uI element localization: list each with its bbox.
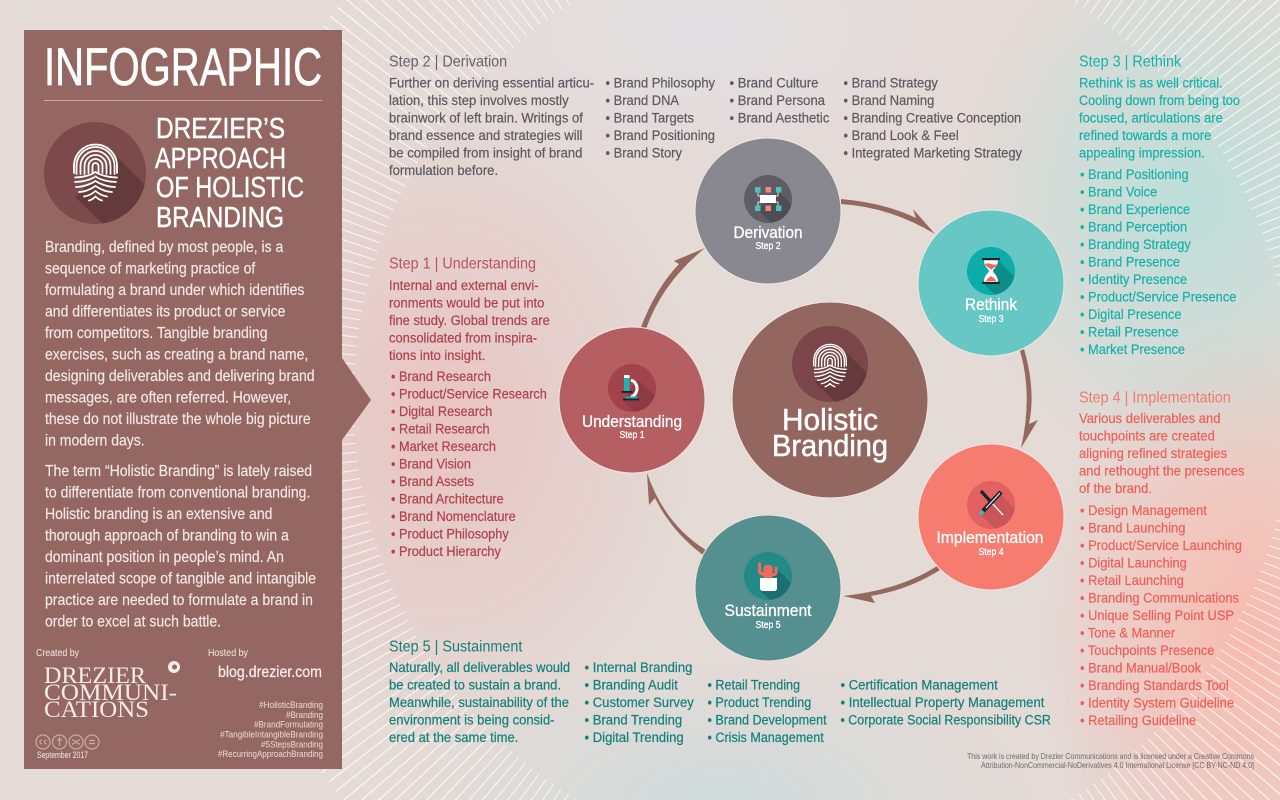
list: column 3: • Brand Naming bbox=[844, 93, 934, 108]
text block: Meanwhile, sustainability of the bbox=[389, 695, 569, 710]
list: • Product/Service Launching bbox=[1080, 538, 1242, 553]
node label bbox=[582, 412, 682, 441]
list: column 2: • Brand Aesthetic bbox=[730, 110, 830, 126]
heading: Step 5 | Sustainment bbox=[389, 638, 523, 656]
hashtags: #5StepsBranding bbox=[261, 740, 323, 750]
text block: of the brand. bbox=[1079, 481, 1152, 496]
node label: Rethink bbox=[965, 295, 1017, 314]
list: column 3: • Brand Strategy bbox=[844, 75, 938, 91]
subtitle: DREZIER’S bbox=[156, 113, 285, 145]
text block: branding definition: Branding, defined by most people, is a bbox=[45, 239, 284, 256]
list: • Identity Presence bbox=[1080, 271, 1187, 287]
arrow: understanding to derivation bbox=[641, 248, 705, 329]
credit: hosted by: blog.drezier.com bbox=[218, 664, 322, 681]
list: column 1: • Brand DNA bbox=[606, 93, 679, 108]
text block: be created to sustain a brand. bbox=[389, 677, 561, 693]
text block bbox=[389, 75, 594, 178]
arrow: derivation to rethink bbox=[841, 199, 935, 234]
text block: holistic branding definition: thorough approach of branding to win a bbox=[45, 528, 290, 545]
icon: microscope bbox=[608, 364, 656, 412]
text block: consolidated from inspira- bbox=[389, 330, 537, 346]
text block: holistic branding definition: Holistic branding is an extensive and bbox=[45, 506, 272, 523]
list: • Brand Experience bbox=[1080, 201, 1190, 217]
node: step 3 rethink bbox=[918, 210, 1064, 356]
list: • Brand Architecture bbox=[391, 491, 504, 507]
hashtags: #RecurringApproachBranding bbox=[218, 749, 323, 760]
text block: lation, this step involves mostly bbox=[389, 93, 569, 108]
text block: branding definition: formulating a brand under which identifies bbox=[45, 282, 304, 299]
list: • Brand Positioning bbox=[1080, 166, 1189, 182]
list: • Branding Standards Tool bbox=[1080, 678, 1229, 693]
text block: Various deliverables and bbox=[1079, 411, 1220, 426]
icon: potted cactus bbox=[744, 552, 792, 600]
list: • Market Presence bbox=[1080, 341, 1185, 357]
hub label: Branding bbox=[772, 428, 888, 463]
list: column 3: • Intellectual Property Management bbox=[840, 695, 1045, 710]
list: • Brand Research bbox=[391, 368, 491, 384]
node label: Implementation bbox=[936, 528, 1044, 547]
list: column 1: • Brand Targets bbox=[606, 110, 694, 126]
arrow: implementation to sustainment bbox=[843, 566, 940, 603]
list: • Branding Communications bbox=[1080, 590, 1239, 606]
list bbox=[1080, 166, 1236, 357]
list: • Branding Strategy bbox=[1080, 236, 1191, 252]
text block: branding definition: messages, are often referred. However, bbox=[45, 390, 291, 407]
text block: touchpoints are created bbox=[1079, 428, 1215, 444]
list: • Product Philosophy bbox=[391, 526, 509, 542]
text block: holistic branding definition: order to excel at such battle. bbox=[45, 614, 221, 631]
panel: step 1 understanding bbox=[389, 255, 550, 559]
text block: brainwork of left brain. Writings of bbox=[389, 110, 583, 126]
list: column 3 bbox=[844, 75, 1022, 161]
text block: appealing impression. bbox=[1079, 145, 1205, 161]
node label: Step 2 bbox=[756, 240, 781, 252]
text block: branding definition: and differentiates its product or service bbox=[45, 304, 285, 321]
text block: environment is being consid- bbox=[389, 712, 555, 728]
credit: hosted by: Hosted by bbox=[208, 647, 249, 659]
list: column 2: • Product Trending bbox=[708, 694, 811, 710]
list: • Brand Manual/Book bbox=[1080, 660, 1201, 676]
credit: created by logo: COMMUNI- bbox=[44, 680, 177, 705]
text block: brand essence and strategies will bbox=[389, 128, 582, 143]
list: • Retail Research bbox=[391, 421, 490, 437]
text block: holistic branding definition: dominant position in people’s mind. An bbox=[45, 549, 284, 566]
title: INFOGRAPHIC bbox=[44, 38, 322, 97]
panel: step 3 rethink bbox=[1079, 53, 1240, 357]
list: column 1: • Brand Story bbox=[606, 145, 682, 161]
list: column 1: • Brand Positioning bbox=[606, 128, 715, 143]
list: • Brand Perception bbox=[1080, 219, 1187, 235]
node: holistic branding hub bbox=[732, 302, 928, 498]
list: column 1: • Brand Trending bbox=[584, 712, 682, 728]
list: • Brand Assets bbox=[391, 473, 474, 489]
list: column 2 bbox=[730, 75, 830, 126]
icon: fingerprint bbox=[792, 326, 868, 402]
node label: Step 3 bbox=[978, 313, 1004, 325]
hashtags: #BrandFormulating bbox=[254, 720, 323, 730]
icon: structure diagram bbox=[744, 175, 792, 223]
list: • Brand Vision bbox=[391, 456, 471, 472]
text block: refined towards a more bbox=[1079, 128, 1211, 143]
list: • Brand Nomenclature bbox=[391, 508, 516, 524]
text block bbox=[389, 278, 550, 363]
subtitle: APPROACH bbox=[155, 143, 286, 175]
list: column 1: • Branding Audit bbox=[584, 677, 678, 693]
text block: branding definition: from competitors. Tangible branding bbox=[45, 325, 267, 342]
node label bbox=[724, 601, 812, 631]
hashtags bbox=[218, 700, 323, 760]
hashtags: #HolisticBranding bbox=[259, 700, 323, 711]
list: • Brand Voice bbox=[1080, 184, 1157, 200]
text block: holistic branding definition: interrelated scope of tangible and intangible bbox=[45, 571, 316, 588]
text block: focused, articulations are bbox=[1079, 110, 1223, 126]
panel: step 5 sustainment bbox=[389, 638, 1051, 745]
text block: branding definition: designing deliverables and delivering brand bbox=[45, 368, 315, 385]
text block: formulation before. bbox=[389, 163, 498, 178]
text block: branding definition: in modern days. bbox=[45, 433, 145, 450]
text block bbox=[1079, 411, 1245, 496]
list: column 3: • Integrated Marketing Strategy bbox=[844, 145, 1022, 161]
text block: holistic branding definition bbox=[45, 463, 316, 631]
text block: ronments would be put into bbox=[389, 295, 544, 311]
list: column 1 bbox=[606, 75, 715, 161]
subtitle: OF HOLISTIC bbox=[156, 172, 304, 204]
text block: branding definition bbox=[45, 239, 315, 450]
node: step 1 understanding bbox=[559, 327, 705, 473]
text block: be compiled from insight of brand bbox=[389, 145, 582, 161]
node label bbox=[965, 295, 1017, 325]
list: • Retail Launching bbox=[1080, 573, 1184, 588]
heading: Step 4 | Implementation bbox=[1079, 389, 1231, 407]
arrow: rethink to implementation bbox=[1020, 349, 1038, 448]
list: • Product/Service Presence bbox=[1080, 289, 1236, 305]
list: • Retail Presence bbox=[1080, 324, 1179, 340]
list: • Identity System Guideline bbox=[1080, 695, 1234, 711]
list: • Digital Launching bbox=[1080, 555, 1187, 571]
node label bbox=[734, 223, 802, 252]
list: column 2: • Crisis Management bbox=[708, 729, 824, 745]
list: column 2: • Brand Development bbox=[708, 712, 827, 728]
list: column 3: • Certification Management bbox=[840, 677, 998, 693]
text block: Cooling down from being too bbox=[1079, 93, 1240, 108]
text block: holistic branding definition: The term “Holistic Branding” is lately raised bbox=[45, 463, 312, 480]
list: • Product/Service Research bbox=[391, 386, 547, 402]
date: September 2017 bbox=[37, 750, 88, 760]
icon: hourglass bbox=[967, 247, 1015, 295]
list: column 2: • Brand Persona bbox=[730, 93, 825, 108]
credit: created by logo: DREZIER bbox=[44, 663, 147, 688]
text block: ered at the same time. bbox=[389, 730, 518, 745]
text block: holistic branding definition: to differentiate from conventional branding. bbox=[45, 485, 310, 502]
credit: created by logo: Created by bbox=[36, 647, 80, 659]
hub label: Holistic bbox=[782, 402, 878, 437]
text block: fine study. Global trends are bbox=[389, 313, 550, 328]
list: column 1 bbox=[584, 660, 694, 745]
hashtags: #TangibleIntangibleBranding bbox=[220, 730, 323, 740]
heading: Step 1 | Understanding bbox=[389, 255, 536, 273]
heading: Step 2 | Derivation bbox=[389, 53, 507, 71]
credit: hosted by bbox=[208, 647, 322, 681]
node label: Step 4 bbox=[978, 546, 1004, 558]
heading: Step 3 | Rethink bbox=[1079, 53, 1182, 71]
node label: Derivation bbox=[734, 223, 802, 242]
list: • Digital Research bbox=[391, 403, 492, 419]
list: column 1: • Internal Branding bbox=[584, 660, 692, 675]
license note bbox=[967, 751, 1254, 770]
node: step 4 implementation bbox=[918, 444, 1064, 590]
node: step 2 derivation bbox=[695, 138, 841, 284]
list: column 1: • Customer Survey bbox=[584, 695, 694, 710]
hashtags: #Branding bbox=[286, 710, 323, 721]
hub label bbox=[772, 402, 888, 463]
list: • Digital Presence bbox=[1080, 306, 1181, 322]
text block: branding definition: exercises, such as creating a brand name, bbox=[45, 347, 308, 364]
list: column 2: • Retail Trending bbox=[708, 677, 800, 693]
list: column 1: • Digital Trending bbox=[584, 730, 684, 745]
text block: Further on deriving essential articu- bbox=[389, 75, 594, 91]
list: • Design Management bbox=[1080, 503, 1207, 518]
list: • Market Research bbox=[391, 438, 496, 454]
list: • Brand Launching bbox=[1080, 520, 1185, 536]
credit: created by logo bbox=[36, 647, 180, 722]
text block: Naturally, all deliverables would bbox=[389, 660, 570, 675]
text block: branding definition: sequence of marketing practice of bbox=[45, 261, 256, 278]
text block: tions into insight. bbox=[389, 348, 485, 363]
list bbox=[1080, 503, 1242, 728]
subtitle bbox=[155, 113, 304, 234]
node: step 5 sustainment bbox=[695, 515, 841, 661]
list: column 3: • Branding Creative Conception bbox=[844, 110, 1021, 126]
icon: fingerprint badge bbox=[44, 122, 146, 224]
list: • Product Hierarchy bbox=[391, 543, 501, 559]
list: column 3: • Brand Look & Feel bbox=[844, 128, 959, 143]
list: • Tone & Manner bbox=[1080, 625, 1176, 641]
text block bbox=[389, 660, 570, 745]
panel: step 4 implementation bbox=[1079, 389, 1245, 728]
list: column 3 bbox=[840, 677, 1051, 728]
list: column 2: • Brand Culture bbox=[730, 75, 818, 91]
list: column 2 bbox=[708, 677, 827, 745]
text block: holistic branding definition: practice are needed to formulate a brand in bbox=[45, 592, 313, 609]
list: • Brand Presence bbox=[1080, 254, 1180, 270]
node label: Understanding bbox=[582, 412, 682, 431]
list: • Retailing Guideline bbox=[1080, 713, 1196, 728]
credit: created by logo: CATIONS bbox=[44, 697, 149, 722]
node label bbox=[936, 528, 1044, 558]
panel: introduction sidebar bbox=[24, 30, 371, 769]
node label: Step 5 bbox=[756, 619, 781, 631]
icon: crossed pen and pencil bbox=[967, 481, 1015, 529]
panel: step 2 derivation bbox=[389, 53, 1022, 178]
icon: creative commons badges bbox=[36, 735, 99, 749]
subtitle: BRANDING bbox=[156, 202, 284, 234]
node label: Step 1 bbox=[620, 429, 645, 441]
list: • Touchpoints Presence bbox=[1080, 643, 1214, 658]
list: • Unique Selling Point USP bbox=[1080, 608, 1234, 623]
text block: and rethought the presences bbox=[1079, 463, 1245, 479]
node label: Sustainment bbox=[724, 601, 812, 620]
list: column 3: • Corporate Social Responsibility CSR bbox=[840, 712, 1051, 728]
text block: Rethink is as well critical. bbox=[1079, 75, 1223, 91]
text block: branding definition: these do not illustrate the whole big picture bbox=[45, 411, 311, 428]
text block: aligning refined strategies bbox=[1079, 446, 1227, 461]
list bbox=[391, 368, 547, 559]
list: column 1: • Brand Philosophy bbox=[606, 75, 715, 91]
arrow: sustainment to understanding bbox=[647, 473, 706, 555]
text block: Internal and external envi- bbox=[389, 278, 539, 293]
text block bbox=[1079, 75, 1240, 161]
